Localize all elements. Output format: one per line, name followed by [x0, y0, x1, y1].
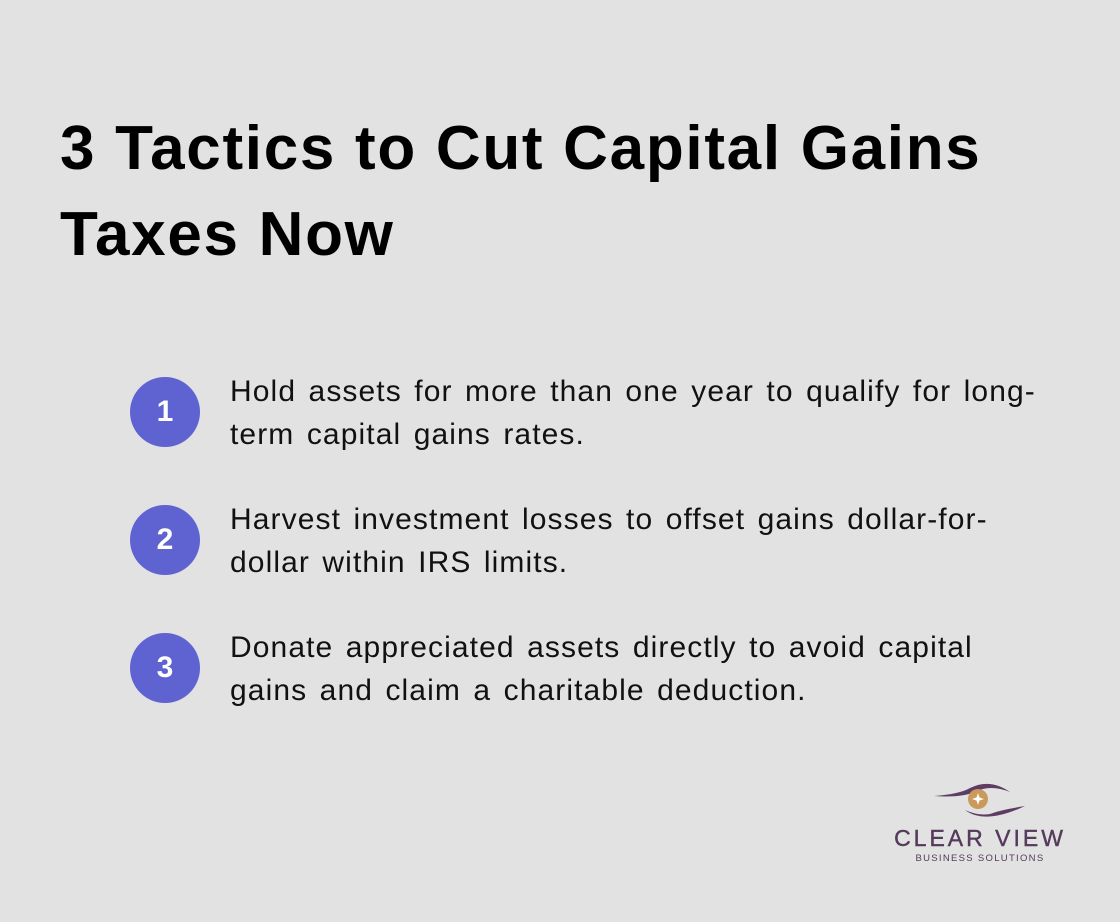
title: 3 Tactics to Cut Capital Gains: [60, 114, 981, 183]
title: [60, 114, 981, 269]
text 2: [230, 503, 988, 579]
text 2: Harvest investment losses to offset gains dollar-for-: [230, 503, 988, 536]
text 1: [230, 375, 1036, 451]
text 3: [230, 631, 973, 707]
text 1: term capital gains rates.: [230, 418, 585, 451]
item 3: [130, 631, 973, 707]
number badge 3: [130, 633, 200, 703]
text 3: Donate appreciated assets directly to avoid capital: [230, 631, 973, 664]
number badge 2: [130, 505, 200, 575]
number badge 1: [130, 377, 200, 447]
number badge 3: 3: [157, 651, 173, 684]
logo: [894, 784, 1066, 864]
text 3: gains and claim a charitable deduction.: [230, 674, 807, 707]
number badge 2: 2: [157, 523, 173, 556]
text 2: dollar within IRS limits.: [230, 546, 568, 579]
title: Taxes Now: [60, 200, 395, 269]
item 2: [130, 503, 988, 579]
item 1: [130, 375, 1036, 451]
number badge 1: 1: [157, 395, 173, 428]
logo: BUSINESS SOLUTIONS: [916, 853, 1044, 864]
logo text: CLEAR VIEW: [894, 825, 1066, 851]
text 1: Hold assets for more than one year to qualify for long-: [230, 375, 1036, 408]
icon: eye: [934, 784, 1025, 817]
